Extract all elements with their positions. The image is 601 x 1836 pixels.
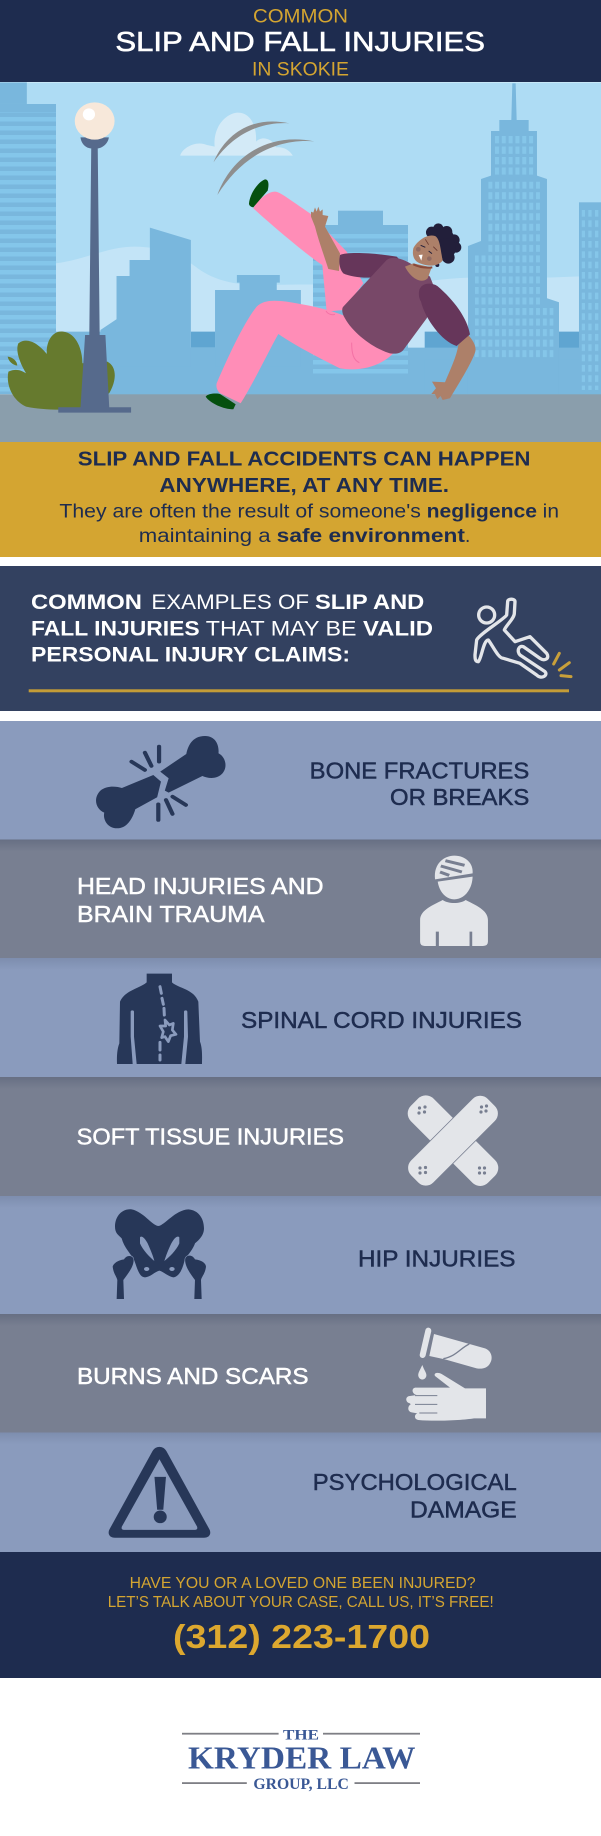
street lamp: [58, 102, 131, 413]
panel: soft tissue: [0, 1077, 601, 1196]
shoes: [206, 179, 268, 409]
falling person: [206, 179, 476, 409]
call to action text: [108, 1575, 494, 1611]
label: psychological damage: DAMAGE: [410, 1497, 517, 1523]
logo: Kryder Law Group: GROUP, LLC: [253, 1776, 349, 1793]
label: bone fractures: BONE FRACTURES: [310, 757, 529, 783]
raised arm: [311, 207, 340, 271]
logo: Kryder Law Group: [182, 1728, 420, 1793]
motion swooshes: [213, 122, 314, 195]
back leg: [253, 192, 363, 312]
panel heading: EXAMPLES OF: [151, 590, 309, 614]
header banner: [0, 0, 601, 82]
face: [413, 235, 443, 266]
label: bone fractures: [310, 757, 529, 810]
icon: broken bone: [96, 736, 225, 828]
far sleeve: [339, 253, 400, 278]
logo: Kryder Law Group: KRYDER LAW: [188, 1740, 416, 1776]
shirt: [342, 258, 436, 354]
panel: gold intro: [0, 442, 601, 557]
neck: [405, 263, 432, 281]
label: psychological damage: PSYCHOLOGICAL: [313, 1469, 517, 1495]
panel: head injuries: [0, 840, 601, 958]
label: soft tissue: SOFT TISSUE INJURIES: [77, 1124, 344, 1150]
icon: falling person outline: [475, 599, 571, 677]
label: burns and scars: BURNS AND SCARS: [77, 1363, 308, 1389]
phone number: (312) 223-1700: [173, 1618, 430, 1655]
label: bone fractures: OR BREAKS: [390, 784, 529, 810]
heading: common: COMMON: [253, 7, 348, 28]
panel heading: VALID: [363, 617, 433, 641]
panel heading: THAT MAY BE: [206, 617, 356, 641]
panel: spinal cord: [0, 958, 601, 1077]
icon: crossed bandages: [403, 1091, 503, 1191]
icon: spine back: [117, 974, 202, 1064]
centre striped building: [313, 211, 408, 378]
near arm: [431, 333, 476, 400]
panel: hip injuries: [0, 1196, 601, 1314]
intro body text: in: [543, 501, 559, 522]
hair: [426, 223, 461, 267]
panel: bone fractures: [0, 721, 601, 840]
panel heading: [31, 590, 433, 667]
panel heading: SLIP AND: [315, 590, 424, 614]
label: head injuries: [77, 873, 324, 927]
left tower: [0, 104, 56, 394]
illustration: city scene with falling person: [0, 82, 601, 442]
label: head injuries: BRAIN TRAUMA: [77, 901, 265, 927]
icon: warning triangle: [109, 1447, 210, 1538]
label: spinal cord: SPINAL CORD INJURIES: [241, 1007, 522, 1033]
heading: in Skokie: IN SKOKIE: [252, 60, 349, 81]
panel heading: PERSONAL INJURY CLAIMS:: [31, 643, 350, 667]
call to action text: LET’S TALK ABOUT YOUR CASE, CALL US, IT’S FREE!: [108, 1594, 494, 1611]
panel: psychological damage: [0, 1432, 601, 1552]
title: SLIP AND FALL INJURIES: [115, 26, 485, 57]
label: psychological damage: [313, 1469, 517, 1523]
sky and city background: [0, 82, 601, 442]
label: head injuries: HEAD INJURIES AND: [77, 873, 324, 899]
logo: Kryder Law Group: THE: [283, 1728, 319, 1744]
intro body text: safe environment: [277, 526, 466, 547]
near sleeve: [419, 284, 470, 346]
icon: pelvis: [113, 1209, 206, 1299]
intro headline: [78, 448, 531, 497]
panel heading: FALL INJURIES: [31, 617, 200, 641]
intro body text: maintaining a: [139, 526, 271, 547]
bush: [8, 331, 115, 410]
intro headline: ANYWHERE, AT ANY TIME.: [159, 474, 449, 497]
icon: bandaged head: [420, 856, 488, 946]
intro body text: They are often the result of someone's: [59, 501, 421, 522]
ground: [0, 394, 601, 442]
front leg: [216, 301, 393, 403]
intro headline: SLIP AND FALL ACCIDENTS CAN HAPPEN: [78, 448, 531, 471]
panel heading: COMMON: [31, 590, 142, 614]
panel: call to action footer: [0, 1552, 601, 1678]
intro body text: .: [465, 526, 470, 547]
call to action text: HAVE YOU OR A LOVED ONE BEEN INJURED?: [130, 1575, 476, 1592]
intro body text: negligence: [427, 501, 537, 522]
intro body text: [59, 501, 559, 547]
right skyscrapers: [468, 83, 601, 394]
panel: burns and scars: [0, 1314, 601, 1432]
label: hip injuries: HIP INJURIES: [358, 1245, 516, 1271]
panel: common examples: [0, 566, 601, 711]
icon: chemical burn hand: [406, 1331, 492, 1421]
